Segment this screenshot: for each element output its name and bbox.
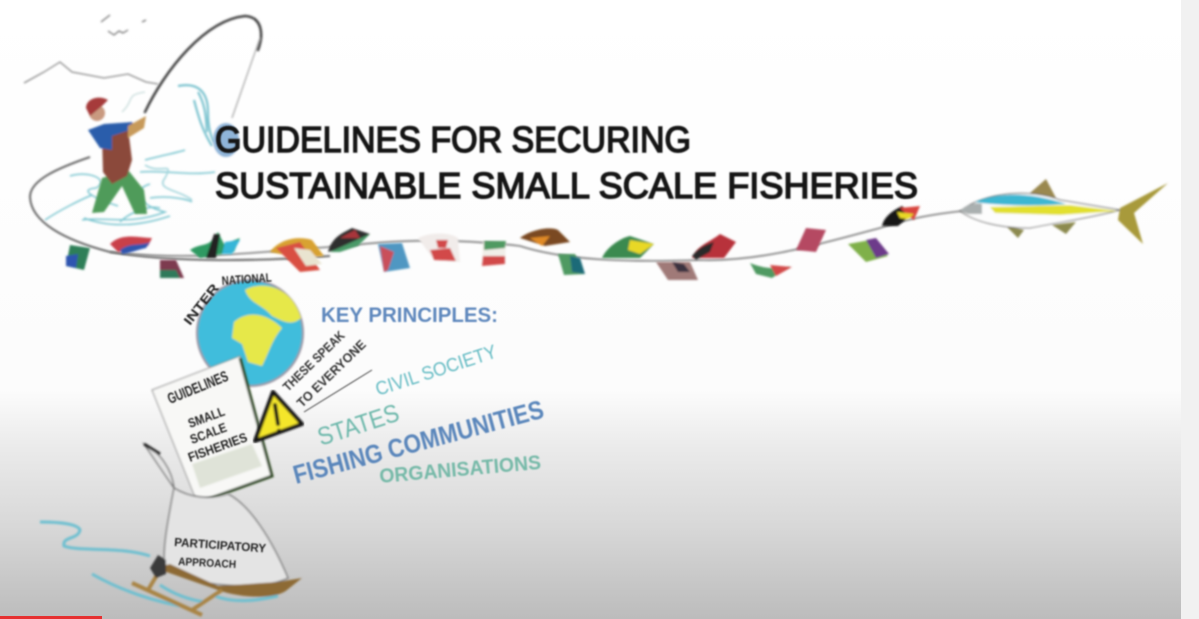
cap	[86, 98, 108, 116]
outrigger	[132, 570, 222, 615]
flag 16	[796, 228, 826, 252]
flag 12	[602, 236, 654, 258]
right side strip	[1181, 0, 1199, 619]
illustration: sailing boat	[40, 444, 302, 615]
body	[960, 193, 1120, 228]
flag 3	[160, 260, 184, 278]
blue back	[975, 195, 1066, 205]
flag 6	[328, 228, 370, 252]
sail label: participatory approach: APPROACH	[178, 556, 236, 571]
flag 8	[418, 234, 460, 262]
flag 7	[378, 243, 410, 272]
note: these speak to everyone: TO EVERYONE	[294, 337, 369, 410]
icon: guidelines booklet	[152, 356, 272, 502]
label: states: STATES	[314, 399, 403, 452]
flags bunting	[66, 206, 920, 280]
booklet title: GUIDELINES	[165, 368, 231, 408]
label: organisations: ORGANISATIONS	[379, 452, 542, 488]
title: SUSTAINABLE SMALL SCALE FISHERIES	[215, 165, 918, 206]
fishing line	[232, 38, 260, 118]
dorsal fin	[1030, 179, 1056, 198]
illustration: birds and mountains	[24, 15, 158, 84]
title: GUIDELINES FOR SECURING	[215, 119, 691, 160]
illustration: tuna fish	[960, 179, 1168, 244]
sail tip	[144, 444, 160, 454]
booklet title: SMALL	[186, 404, 227, 431]
sail	[144, 444, 288, 586]
flag 2	[110, 236, 152, 252]
label: civil society: CIVIL SOCIETY	[373, 342, 500, 401]
lower fins	[1006, 222, 1076, 238]
head	[89, 105, 105, 121]
video progress bar	[0, 616, 102, 619]
label: fishing communities: FISHING COMMUNITIES	[290, 394, 547, 490]
flag 10	[520, 228, 570, 246]
yellow stripe	[990, 205, 1118, 215]
fishing rod	[145, 16, 261, 112]
icon: blue splash over title initial	[213, 123, 239, 157]
icon: globe	[197, 280, 303, 386]
sleeves	[88, 122, 136, 150]
title	[215, 119, 918, 206]
vest	[102, 128, 132, 184]
flag 5	[270, 238, 324, 258]
flag 1	[66, 245, 90, 270]
flag 17	[848, 240, 888, 262]
heading: key principles: KEY PRINCIPLES:	[321, 304, 498, 327]
illustration: fisherman	[86, 16, 261, 214]
mast base	[150, 555, 166, 578]
flag 18	[882, 206, 912, 226]
label: international: INTER	[181, 280, 222, 328]
hull	[155, 564, 302, 597]
flag 11	[558, 254, 585, 275]
bunting string	[110, 211, 962, 261]
flag 13	[656, 262, 698, 280]
icon: water ripples around fisherman	[45, 85, 215, 225]
arm	[128, 116, 146, 138]
note: these speak to everyone: THESE SPEAK	[280, 327, 348, 394]
sail label: participatory approach	[174, 535, 267, 571]
icon: warning sign	[255, 392, 302, 441]
flag 9	[482, 241, 506, 266]
booklet title: FISHERIES	[186, 429, 250, 465]
water	[40, 522, 278, 606]
icon: fishing line loop around the fisherman	[30, 157, 330, 260]
flag 14	[692, 234, 736, 258]
flag 4	[190, 232, 240, 258]
tail	[1118, 183, 1168, 244]
text: NATIONAL	[221, 271, 272, 288]
booklet title: SCALE	[188, 420, 229, 447]
flag 15	[750, 263, 790, 278]
booklet title	[165, 368, 250, 465]
sail label: participatory approach: PARTICIPATORY	[174, 535, 267, 555]
legs	[92, 170, 147, 214]
head	[960, 203, 982, 214]
